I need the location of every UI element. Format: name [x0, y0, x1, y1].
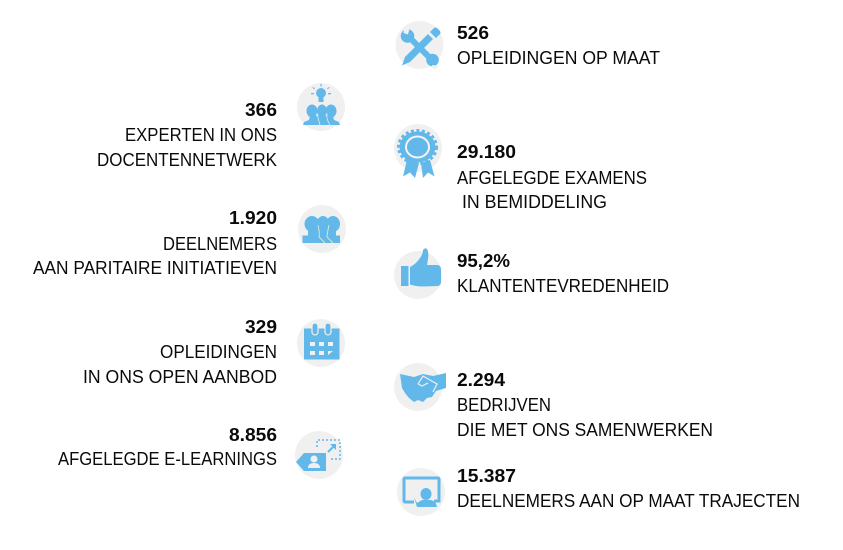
- value: 95,2%: 95,2%: [457, 251, 510, 271]
- label: courses line 2: IN ONS OPEN AANBOD: [83, 367, 277, 387]
- stat: 526 custom courses: [457, 23, 660, 68]
- icon: wrench and pencil: [396, 21, 444, 70]
- label: participants line 2: AAN PARITAIRE INITIATIEVEN: [33, 258, 277, 278]
- label: companies line 1: BEDRIJVEN: [457, 395, 551, 415]
- label: e-learnings: AFGELEGDE E-LEARNINGS: [58, 449, 277, 469]
- stat: 29.180 exams: [457, 142, 647, 212]
- label: courses line 1: OPLEIDINGEN: [160, 342, 277, 362]
- stat: 2.294 companies: [457, 370, 713, 440]
- label: experts line 1: EXPERTEN IN ONS: [125, 125, 277, 145]
- label: participants line 1: DEELNEMERS: [163, 234, 277, 254]
- icon: calendar: [297, 319, 345, 367]
- value: 1.920: 1.920: [229, 208, 277, 228]
- value: 366: 366: [245, 100, 277, 120]
- label: experts line 2: DOCENTENNETWERK: [97, 150, 277, 170]
- label: exams line 2: IN BEMIDDELING: [462, 192, 607, 212]
- stat: 329 courses: [83, 317, 277, 387]
- stat: 8.856 e-learnings: [58, 425, 277, 469]
- stat: 95,2% satisfaction: [457, 251, 669, 296]
- value: 526: 526: [457, 23, 489, 43]
- icon: lightbulb over people: [297, 83, 345, 131]
- label: companies line 2: DIE MET ONS SAMENWERKEN: [457, 420, 713, 440]
- icon: thumbs up: [394, 248, 442, 299]
- icon: medal rosette: [394, 124, 442, 178]
- value: 29.180: 29.180: [457, 142, 516, 162]
- stat: 15.387 custom participants: [457, 466, 800, 511]
- value: 329: 329: [245, 317, 277, 337]
- label: custom participants: DEELNEMERS AAN OP MAAT TRAJECTEN: [457, 491, 800, 511]
- icon: handshake: [394, 363, 446, 411]
- value: 8.856: 8.856: [229, 425, 277, 445]
- label: custom courses: OPLEIDINGEN OP MAAT: [457, 48, 660, 68]
- value: 2.294: 2.294: [457, 370, 505, 390]
- value: 15.387: 15.387: [457, 466, 516, 486]
- icon: presenter at screen: [397, 468, 445, 516]
- icon: e-learning tag: [295, 431, 343, 479]
- stat: 366 experts: [97, 100, 277, 170]
- stat: 1.920 participants: [33, 208, 277, 278]
- icon: group of people: [298, 205, 346, 253]
- label: exams line 1: AFGELEGDE EXAMENS: [457, 168, 647, 188]
- label: satisfaction: KLANTENTEVREDENHEID: [457, 276, 669, 296]
